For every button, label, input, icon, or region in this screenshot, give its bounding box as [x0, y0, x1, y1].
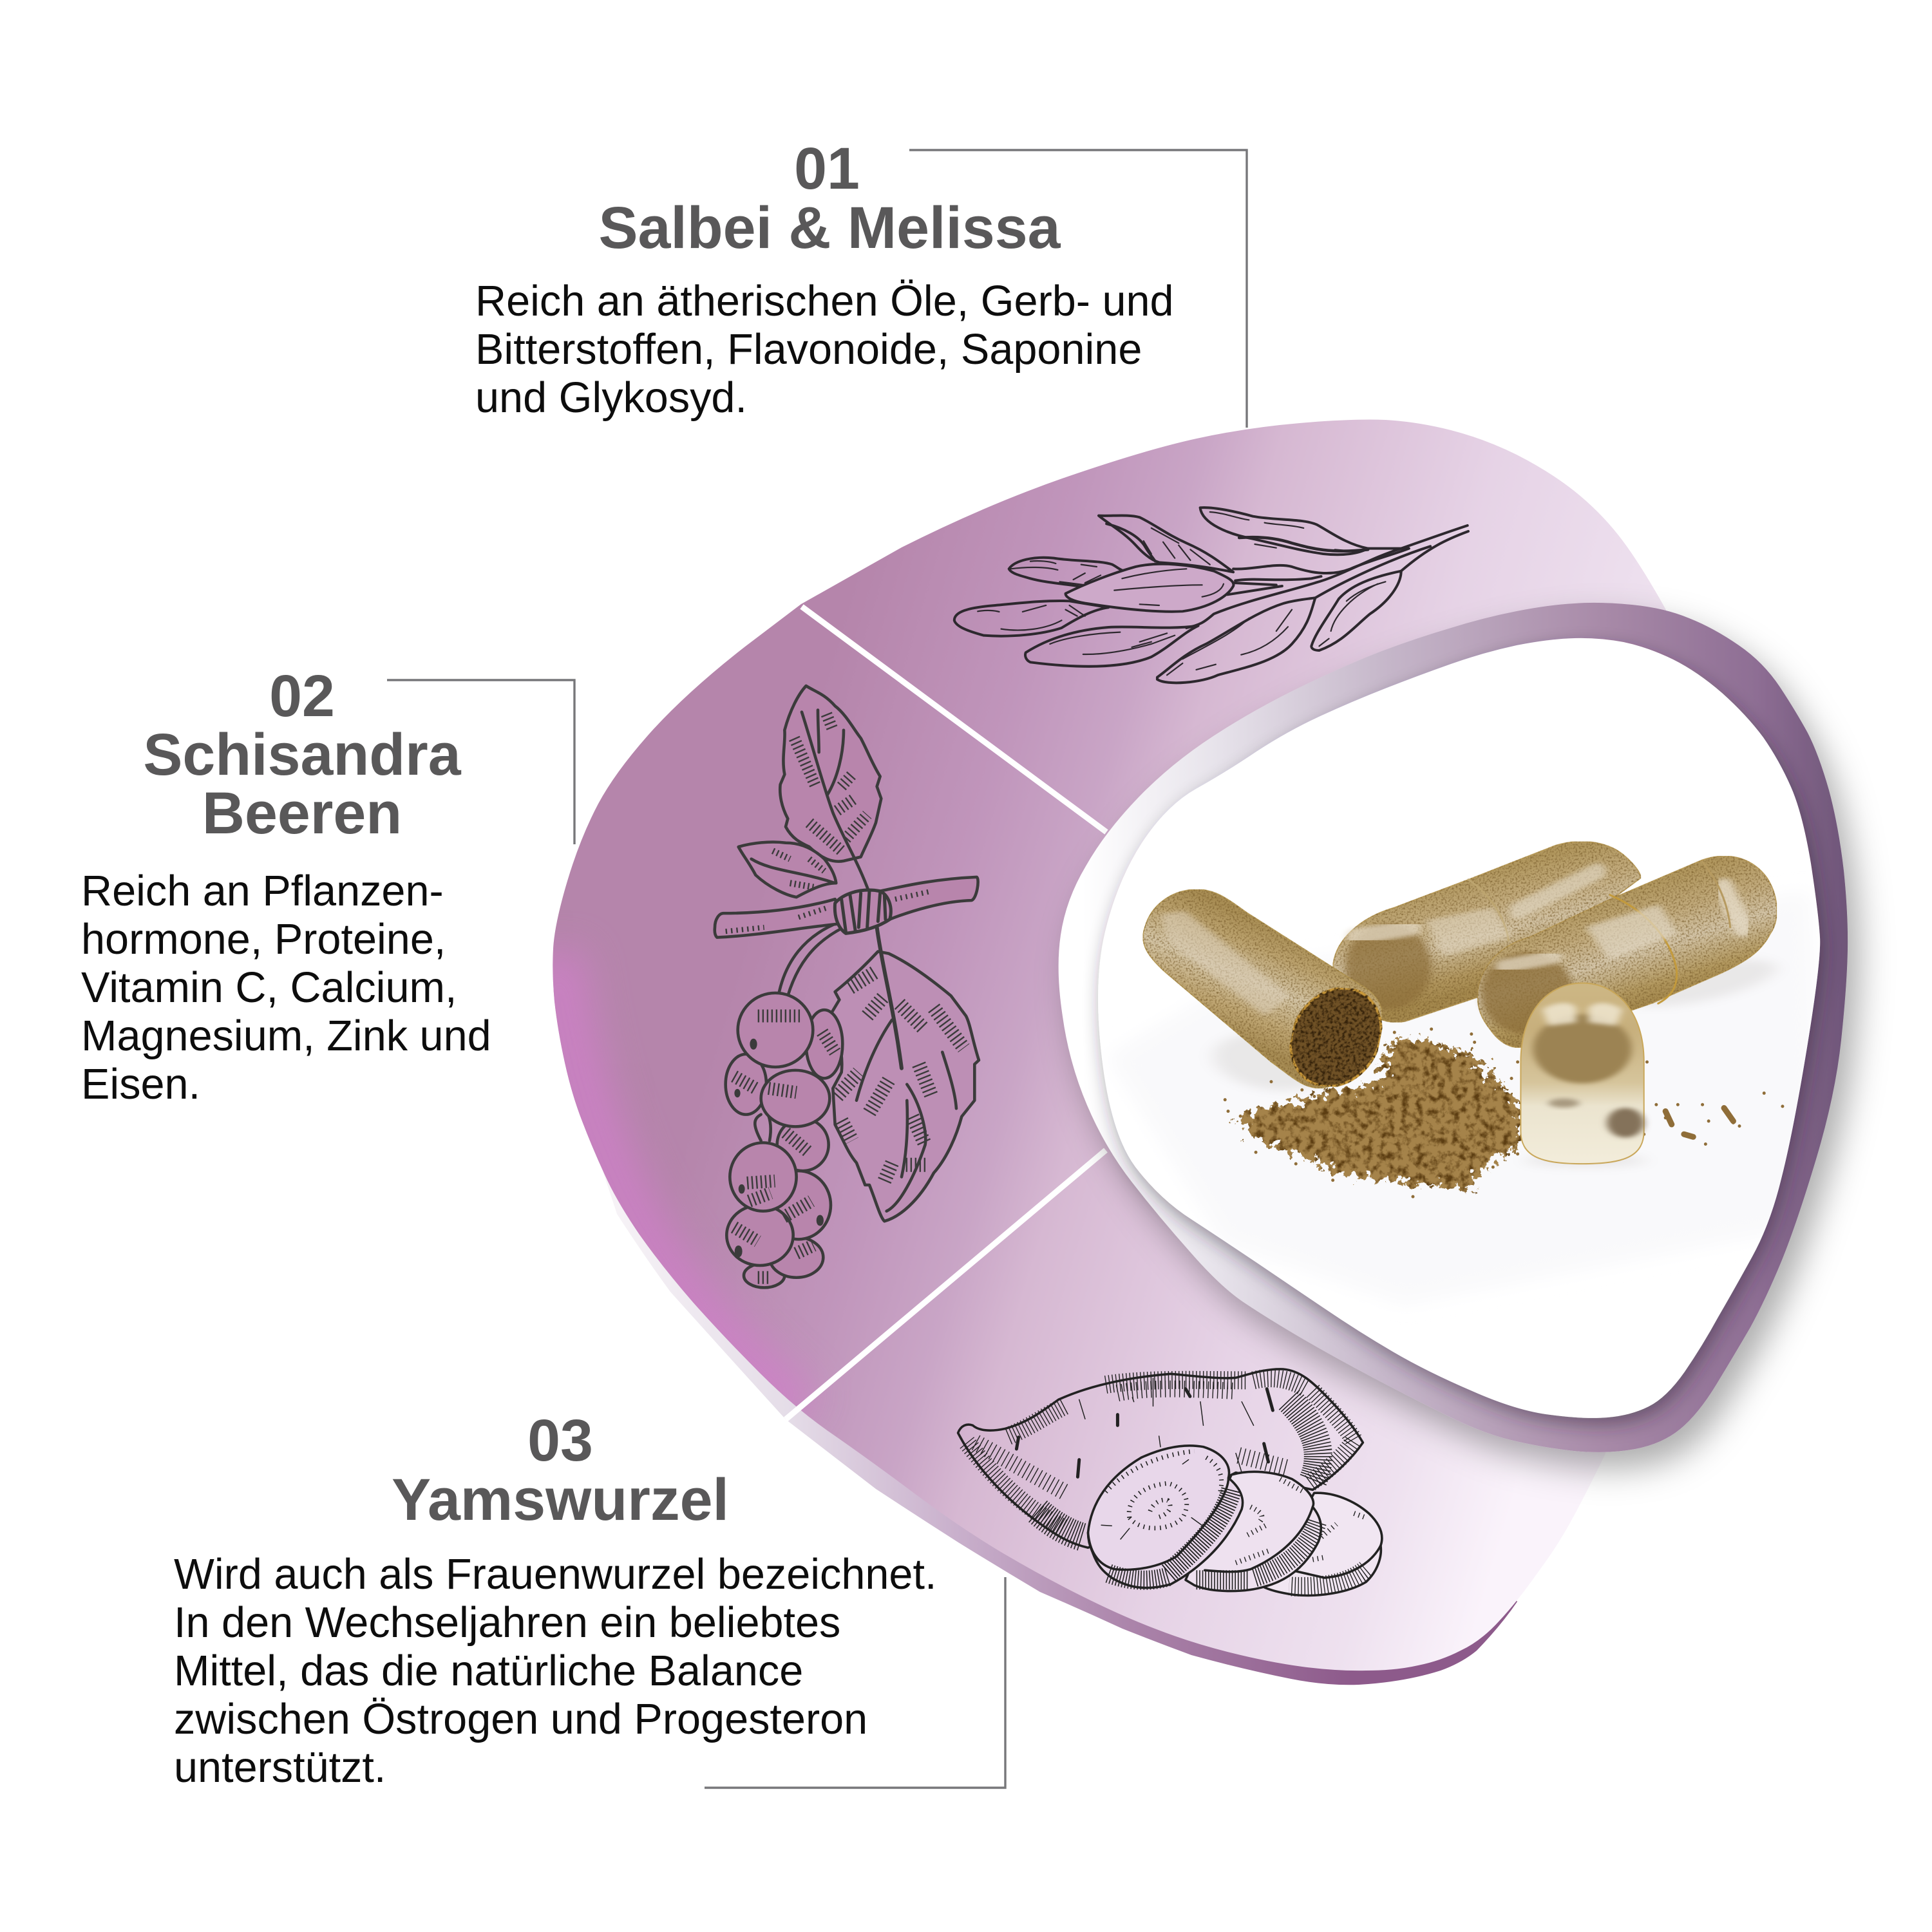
title 02: 02: [269, 663, 335, 729]
upper leaf: [780, 686, 881, 862]
text block 01: [475, 278, 1174, 422]
text block 02: Vitamin C, Calcium,: [81, 964, 457, 1012]
text block 03: unterstützt.: [174, 1744, 386, 1792]
callout line 03: [705, 1577, 1005, 1788]
capsule: back middle: [1333, 842, 1641, 1022]
title 03: Yamswurzel: [392, 1467, 729, 1533]
powder pile: [1237, 1038, 1524, 1190]
text block 02: hormone, Proteine,: [81, 916, 446, 963]
capsule: front open: [1143, 889, 1390, 1089]
divider lines: [786, 607, 1106, 1419]
title 01: [598, 136, 1061, 261]
text block 01: und Glykosyd.: [475, 374, 747, 422]
photo: capsules and powder: [1142, 841, 1819, 1239]
capsule shadows: [1193, 950, 1788, 1167]
text block 02: [81, 867, 491, 1108]
icon: sage branch: [954, 507, 1468, 683]
text block 01: Reich an ätherischen Öle, Gerb- und: [475, 278, 1174, 325]
text block 03: [174, 1551, 936, 1792]
text block 03: zwischen Östrogen und Progesteron: [174, 1696, 867, 1743]
twig: [715, 899, 844, 938]
powder specks: [1225, 1029, 1847, 1197]
icon: yam root with slices: [958, 1369, 1382, 1595]
text block 03: In den Wechseljahren ein beliebtes: [174, 1599, 840, 1647]
text block 02: Reich an Pflanzen-: [81, 867, 444, 915]
text block 03: Wird auch als Frauenwurzel bezeichnet.: [174, 1551, 936, 1598]
text block 03: Mittel, das die natürliche Balance: [174, 1647, 803, 1695]
title 01: Salbei & Melissa: [598, 195, 1061, 261]
lower lip of the purple shape: [567, 1063, 1517, 1685]
panel: white photo area: [1098, 638, 1820, 1418]
capsule: back right: [1477, 856, 1777, 1048]
text block 02: Magnesium, Zink und: [81, 1012, 491, 1060]
berries: [744, 1264, 784, 1287]
slice 3: [1262, 1493, 1382, 1595]
title 01: 01: [794, 136, 860, 202]
callout line 02: [387, 680, 574, 844]
text block 02: Eisen.: [81, 1061, 200, 1108]
slice 1: [1088, 1446, 1243, 1588]
icon: schisandra berries: [715, 686, 979, 1287]
title 02: Beeren: [202, 781, 402, 846]
title 02: Schisandra: [143, 722, 462, 788]
capsule: upright clear: [1520, 983, 1644, 1164]
panel: purple segmented shape: [553, 420, 1674, 1671]
lower leaf: [829, 952, 979, 1221]
title 03: 03: [527, 1408, 593, 1473]
slice 2: [1186, 1472, 1321, 1591]
callout line 01: [909, 150, 1247, 428]
panel: photo frame rim: [1059, 603, 1848, 1452]
title 03: [392, 1408, 729, 1533]
title 02: [143, 663, 462, 846]
text block 01: Bitterstoffen, Flavonoide, Saponine: [475, 326, 1142, 374]
stalk to berries: [779, 922, 844, 996]
small leaf: [739, 842, 836, 897]
